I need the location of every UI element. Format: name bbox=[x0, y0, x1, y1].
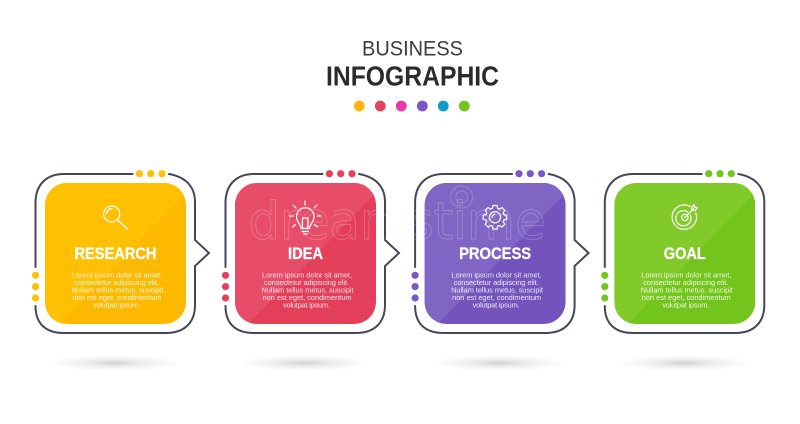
body: process: Lorem ipsum dolor sit amet, bbox=[452, 270, 542, 280]
title: INFOGRAPHIC bbox=[326, 60, 499, 92]
body: goal: consectetur adipiscing elit. bbox=[643, 278, 728, 287]
body: research: Nullam tellus metus, suscipit bbox=[72, 286, 164, 294]
shadow: idea bbox=[239, 355, 371, 371]
body: idea: Nullam tellus metus, suscipit bbox=[262, 286, 354, 294]
icon: light bulb bbox=[290, 201, 321, 234]
heading: goal: GOAL bbox=[664, 245, 706, 263]
body: research: Lorem ipsum dolor sit amet, bbox=[72, 270, 162, 280]
panel: idea bbox=[222, 170, 399, 371]
body: process: consectetur adipiscing elit. bbox=[454, 278, 539, 287]
dots: goal top bbox=[705, 170, 735, 177]
title bbox=[326, 36, 499, 92]
icon: magnifier bbox=[104, 206, 128, 229]
body: process: non est eget, condimentum bbox=[452, 293, 541, 302]
body: research bbox=[72, 270, 164, 310]
body: process: volutpat ipsum. bbox=[473, 300, 520, 310]
heading: idea: IDEA bbox=[288, 245, 323, 263]
body: idea bbox=[262, 270, 354, 310]
watermark: dreamstime bbox=[248, 192, 546, 252]
body: research: volutpat ipsum. bbox=[93, 300, 140, 310]
dots: idea top bbox=[326, 170, 356, 177]
icon: gear bbox=[483, 205, 507, 229]
body: idea: non est eget, condimentum bbox=[262, 293, 352, 302]
colour dots row bbox=[354, 101, 470, 111]
icon: target bbox=[672, 204, 697, 229]
card: research bbox=[45, 183, 186, 324]
heading: process: PROCESS bbox=[459, 245, 531, 263]
panel: process bbox=[412, 170, 589, 371]
body: goal bbox=[641, 270, 733, 310]
body: research: consectetur adipiscing elit. bbox=[74, 278, 159, 287]
shadow: goal bbox=[618, 355, 750, 371]
shadow: research bbox=[49, 355, 181, 371]
card: goal bbox=[614, 183, 755, 324]
dots: process left bbox=[412, 272, 419, 302]
shadow: process bbox=[434, 355, 566, 371]
panel: goal bbox=[601, 170, 764, 371]
card: idea bbox=[235, 183, 376, 324]
outline: research speech bubble bbox=[36, 174, 209, 333]
body: goal: Lorem ipsum dolor sit amet, bbox=[641, 270, 731, 280]
body: research: non est eget, condimentum bbox=[72, 293, 162, 302]
card: process bbox=[425, 183, 566, 324]
panel: research bbox=[32, 170, 209, 371]
body: idea: consectetur adipiscing elit. bbox=[264, 278, 349, 287]
heading: research: RESEARCH bbox=[74, 245, 156, 263]
body: goal: non est eget, condimentum bbox=[642, 293, 731, 302]
outline: idea speech bubble bbox=[226, 174, 399, 333]
dots: research top bbox=[136, 170, 166, 177]
dots: idea left bbox=[222, 272, 229, 302]
outline: goal rounded frame bbox=[605, 174, 764, 333]
body: goal: Nullam tellus metus, suscipit bbox=[641, 286, 733, 294]
body: idea: Lorem ipsum dolor sit amet, bbox=[262, 270, 352, 280]
outline: process speech bubble bbox=[415, 174, 589, 333]
dots: goal left bbox=[601, 272, 608, 302]
dots: process top bbox=[515, 170, 545, 177]
body: idea: volutpat ipsum. bbox=[283, 300, 330, 310]
dots: research left bbox=[32, 272, 39, 302]
body: process: Nullam tellus metus, suscipit bbox=[451, 286, 543, 294]
body: process bbox=[451, 270, 543, 310]
body: goal: volutpat ipsum. bbox=[662, 300, 709, 310]
title: BUSINESS bbox=[362, 36, 463, 60]
